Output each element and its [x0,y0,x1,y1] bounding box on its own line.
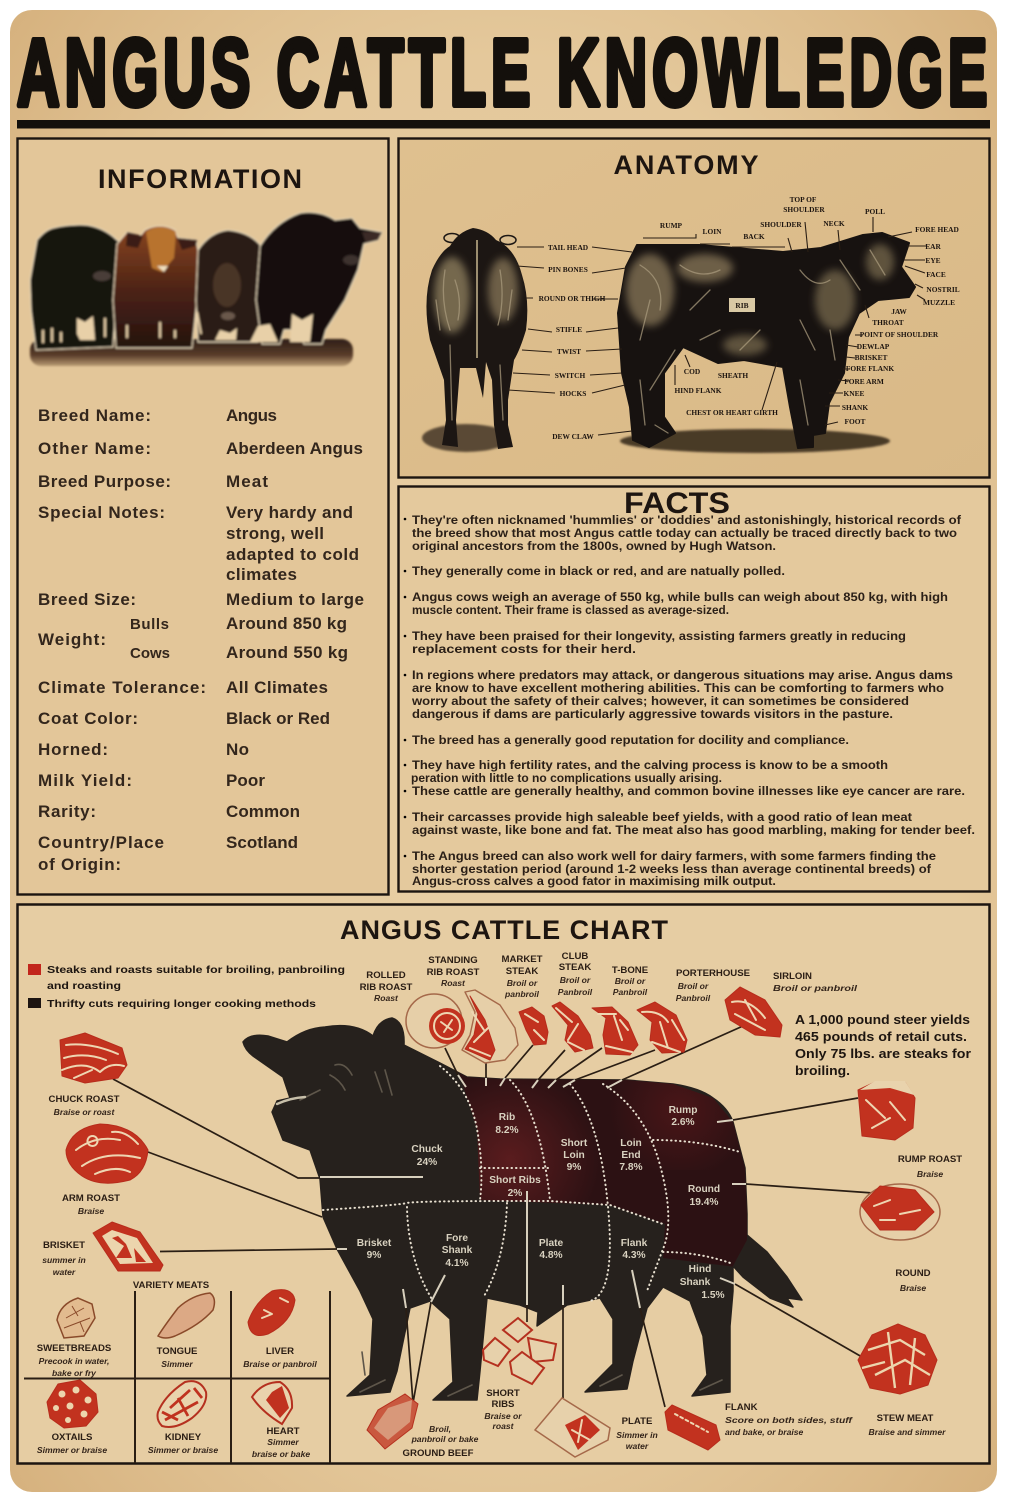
facts bullet list: Angus cows weigh an average of 550 kg, while bulls can weigh about 850 kg, with high [412,590,948,604]
facts bullet list: shorter gestation period (around 1-2 weeks less than average continental breeds) of [412,862,931,876]
info table: breed facts: Horned: [38,740,108,759]
cut: plate: water [626,1441,649,1451]
cow section labels: Short [561,1138,588,1149]
callout: yield note: A 1,000 pound steer yields [795,1013,970,1027]
cut: short ribs: RIBS [492,1399,515,1410]
info table: breed facts: Breed Name: [38,406,151,425]
info table: breed facts: Cows [130,645,170,662]
cow section labels: 8.2% [495,1125,519,1136]
anatomy labels: LOIN [703,227,722,236]
anatomy labels: SHOULDER [783,205,825,214]
anatomy labels: HIND FLANK [674,386,722,395]
panel: information [18,138,388,894]
cut: arm roast: ARM ROAST [62,1193,120,1204]
cow section labels: Chuck [411,1144,443,1155]
cut: liver: LIVER [266,1346,294,1357]
facts bullet list: dangerous if dams are particularly aggressive towards visitors in the pasture. [412,707,893,721]
anatomy labels: MUZZLE [923,298,955,307]
cow section labels: 4.3% [622,1250,646,1261]
cut: plate [535,1398,658,1457]
cut: rolled rib roast: Roast [374,993,399,1003]
anatomy labels: FORE ARM [844,377,884,386]
heading: information: INFORMATION [98,164,302,194]
cut: club steak: STEAK [559,962,591,973]
cow section labels [357,1105,725,1301]
cow section labels: Loin [620,1138,642,1149]
cow cut diagram [243,1018,802,1400]
cut: club steak: CLUB [562,951,588,962]
cow section labels: 24% [417,1157,437,1168]
anatomy labels: DEWLAP [857,342,890,351]
cut: round: Braise [900,1283,926,1293]
cow section labels: 19.4% [690,1197,718,1208]
anatomy labels: SHEATH [718,371,748,380]
cow side view [618,233,915,453]
cow section labels: 2.6% [671,1117,695,1128]
heading: anatomy: ANATOMY [614,150,758,180]
anatomy labels: TWIST [557,347,581,356]
anatomy labels: EYE [925,256,941,265]
anatomy labels: NOSTRIL [926,285,960,294]
anatomy labels: POLL [865,207,885,216]
cut: arm roast: Braise [78,1206,104,1216]
cut: liver: Braise or panbroil [243,1359,317,1369]
anatomy labels: SWITCH [555,371,585,380]
callout: yield note: 465 pounds of retail cuts. [795,1030,967,1044]
cut: standing rib roast: Roast [441,978,466,988]
cut: stew meat: Braise and simmer [869,1427,946,1437]
heading: variety meats: VARIETY MEATS [133,1280,210,1291]
info table: breed facts: Country/Place [38,833,164,852]
info table: breed facts [38,406,364,874]
facts bullet list: The breed has a generally good reputation for docility and compliance. [412,733,849,747]
info table: breed facts: Medium to large [226,590,364,609]
cut: liver [243,1290,317,1369]
cut: tongue [157,1293,214,1369]
info table: breed facts: Breed Purpose: [38,472,171,491]
info table: breed facts: Coat Color: [38,709,138,728]
cow section labels: Hind [689,1264,711,1275]
info table: breed facts: Black or Red [226,709,330,728]
info table: breed facts: All Climates [226,678,328,697]
cut: flank: FLANK [725,1402,758,1413]
cut: porterhouse: Panbroil [676,993,711,1003]
cut: rump roast [858,1081,962,1179]
cut: plate: PLATE [622,1416,653,1427]
cut: t-bone [592,965,649,1055]
anatomy labels: THROAT [872,318,904,327]
anatomy labels: RUMP [660,221,683,230]
cut: tongue: Simmer [161,1359,193,1369]
cut: heart: braise or bake [252,1449,310,1459]
info table: breed facts: Special Notes: [38,503,165,522]
cut: heart: Simmer [267,1437,299,1447]
cow rear view [422,228,527,452]
cut: kidney [148,1381,218,1455]
heading: chart: ANGUS CATTLE CHART [340,915,668,945]
label: rib: RIB [735,301,749,310]
cut: rump roast: Braise [917,1169,943,1179]
cut: club steak [552,951,593,1052]
cut: flank: Score on both sides, stuff [725,1415,853,1425]
cut: stew meat [858,1324,946,1437]
cut: standing rib roast: RIB ROAST [427,967,480,978]
cut: oxtails: OXTAILS [52,1432,93,1443]
cut: brisket [42,1222,163,1277]
info table: breed facts: Milk Yield: [38,771,132,790]
callout: yield note: Only 75 lbs. are steaks for [795,1047,971,1061]
info table: breed facts: climates [226,565,297,584]
anatomy labels: EAR [925,242,941,251]
cut: market steak: Broil or [507,978,538,988]
panel: facts [398,486,990,892]
cut: rump roast: RUMP ROAST [898,1154,962,1165]
anatomy labels: BRISKET [855,353,887,362]
info table: breed facts: Rarity: [38,802,96,821]
cow section labels: Fore [446,1233,468,1244]
cut: rolled rib roast: RIB ROAST [360,982,413,993]
cut: brisket: BRISKET [43,1240,85,1251]
facts bullet list: They have high fertility rates, and the calving process is know to be a smooth [412,758,888,772]
cut: chuck roast: Braise or roast [54,1107,115,1117]
cow section labels: Rump [669,1105,697,1116]
cut: short ribs: SHORT [486,1388,520,1399]
cut: t-bone: Broil or [615,976,646,986]
cut: ground beef: GROUND BEEF [403,1448,474,1459]
info table: breed facts: adapted to cold [226,545,359,564]
anatomy labels: FOOT [845,417,866,426]
legend [28,964,345,1010]
cow section labels: 9% [567,1162,581,1173]
cow section labels: Loin [563,1150,585,1161]
anatomy labels: ROUND OR THIGH [539,294,606,303]
anatomy labels: STIFLE [556,325,582,334]
facts bullet list: These cattle are generally healthy, and common bovine illnesses like eye cancer are rare. [412,784,965,798]
facts bullet list: Their carcasses provide high saleable beef yields, with a good ratio of lean meat [412,810,912,824]
facts bullet list: muscle content. Their frame is classed as average-sized. [412,603,729,617]
info table: breed facts: Other Name: [38,439,151,458]
cut: chuck roast: CHUCK ROAST [49,1094,120,1105]
anatomy labels: CHEST OR HEART GIRTH [686,408,778,417]
anatomy labels: FACE [926,270,946,279]
cut: plate: Simmer in [616,1430,658,1440]
cut: oxtails [37,1380,107,1455]
cut: market steak: MARKET [501,954,543,965]
cut: sweetbreads: bake or fry [52,1368,97,1378]
cut: round [860,1184,940,1293]
anatomy labels: COD [684,367,700,376]
facts bullet list [404,513,975,888]
cut: short ribs: roast [492,1421,515,1431]
heading: facts: FACTS [624,487,730,520]
cut: flank [665,1402,853,1450]
facts bullet list: are know to have excellent mothering abilities. This can be comforting to farmers who [412,681,944,695]
info table: breed facts: Around 850 kg [226,614,347,633]
callout: yield note: broiling. [795,1064,850,1078]
cut: heart [252,1382,310,1459]
label: rib [729,298,755,312]
cow section labels: 9% [367,1250,381,1261]
info table: breed facts: Very hardy and [226,503,353,522]
anatomy labels: SHOULDER [760,220,802,229]
info table: breed facts: Around 550 kg [226,643,348,662]
cow section labels: 4.8% [539,1250,563,1261]
cow section labels: Shank [442,1245,473,1256]
info table: breed facts: Meat [226,472,268,491]
cut: arm roast [62,1124,148,1216]
cut: ground beef: panbroil or bake [411,1434,479,1444]
facts bullet list: against waste, like bone and fat. The meat also has good marbling, making for tender beef. [412,823,975,837]
callout: yield note [795,1013,971,1078]
cut: heart: HEART [266,1426,300,1437]
cut: flank: and bake, or braise [725,1427,804,1437]
cut: sirloin: SIRLOIN [773,971,812,982]
variety meats grid [24,1291,330,1463]
info table: breed facts: Scotland [226,833,298,852]
legend: Thrifty cuts requiring longer cooking methods [47,998,316,1010]
info table: breed facts: Common [226,802,300,821]
anatomy labels: SHANK [842,403,868,412]
cow section labels: 1.5% [701,1290,725,1301]
cut: kidney: KIDNEY [165,1432,202,1443]
cut: short ribs: Braise or [484,1411,522,1421]
panel: anatomy [398,138,990,478]
cut: standing rib roast [427,955,518,1063]
cut: oxtails: Simmer or braise [37,1445,107,1455]
cut: club steak: Broil or [560,975,591,985]
info table: breed facts: of Origin: [38,855,121,874]
cut: sweetbreads: SWEETBREADS [37,1343,112,1354]
info table: breed facts: Angus [226,406,277,425]
anatomy labels: KNEE [844,389,865,398]
cut: chuck roast [49,1033,127,1117]
cut: standing rib roast: STANDING [428,955,478,966]
cut: sirloin [725,971,858,1037]
cut: tongue: TONGUE [157,1346,198,1357]
cut: rolled rib roast [360,970,465,1048]
cut: market steak: panbroil [504,989,540,999]
anatomy labels: JAW [891,307,907,316]
cut: t-bone: T-BONE [612,965,649,976]
title: ANGUS CATTLE KNOWLEDGE [17,18,987,125]
facts bullet list: Angus-cross calves a good fator in maximising milk output. [412,874,776,888]
cow section labels: Plate [539,1238,564,1249]
cut: rolled rib roast: ROLLED [366,970,406,981]
info table: breed facts: Bulls [130,616,169,633]
cow section labels: Brisket [357,1238,392,1249]
cut: sirloin: Broil or panbroil [773,983,858,993]
facts bullet list: peration with little to no complications usually arising. [411,771,722,785]
anatomy labels: NECK [823,219,845,228]
panel: angus cattle chart [18,904,990,1464]
anatomy labels: FORE FLANK [846,364,894,373]
anatomy labels: TOP OF [790,195,817,204]
cut: porterhouse: PORTERHOUSE [676,968,751,979]
cut: stew meat: STEW MEAT [877,1413,934,1424]
info table: breed facts: Climate Tolerance: [38,678,206,697]
cow section labels: 2% [508,1188,522,1199]
facts bullet list: They have been praised for their longevity, assisting farmers greatly in reducing [412,629,906,643]
cut: porterhouse: Broil or [678,981,709,991]
cow section labels: Rib [499,1112,515,1123]
facts bullet list: In regions where predators may attack, or dangerous situations may arise. Angus dams [412,668,953,682]
leader lines [508,217,926,435]
leader lines to cuts [113,1026,873,1407]
anatomy labels: BACK [743,232,765,241]
cut: brisket: water [53,1267,76,1277]
cut: brisket: summer in [42,1255,86,1265]
cut: sweetbreads: Precook in water, [39,1356,109,1366]
cow section labels: Round [688,1184,720,1195]
info table: breed facts: No [226,740,249,759]
cow section labels: Flank [621,1238,648,1249]
cut: short ribs [483,1318,556,1431]
anatomy labels [539,195,960,441]
cut: club steak: Panbroil [558,987,593,997]
cow section labels: Shank [680,1277,711,1288]
info table: breed facts: Poor [226,771,265,790]
anatomy labels: FORE HEAD [915,225,959,234]
anatomy labels: POINT OF SHOULDER [860,330,939,339]
anatomy labels: TAIL HEAD [548,243,588,252]
cut: market steak [501,954,548,1045]
cut: round: ROUND [895,1268,931,1279]
legend: Steaks and roasts suitable for broiling, panbroiling [47,964,345,976]
cow section labels: 4.1% [445,1258,469,1269]
cow section labels: 7.8% [619,1162,643,1173]
info table: breed facts: Aberdeen Angus [226,439,363,458]
info table: breed facts: strong, well [226,524,324,543]
cow section labels: Short Ribs [489,1175,541,1186]
anatomy labels: DEW CLAW [552,432,594,441]
anatomy labels: PIN BONES [548,265,588,274]
photo: four cattle [30,212,382,366]
facts bullet list: replacement costs for their herd. [412,642,636,656]
facts bullet list: the breed show that most Angus cattle today can actually be traced directly back to two [412,526,957,540]
facts bullet list: They're often nicknamed 'hummlies' or 'doddies' and astonishingly, historical records of [412,513,961,527]
cut: ground beef: Broil, [429,1424,451,1434]
cut: porterhouse [637,968,751,1053]
legend: and roasting [47,980,121,992]
info table: breed facts: Breed Size: [38,590,136,609]
cut: t-bone: Panbroil [613,987,648,997]
info table: breed facts: Weight: [38,630,106,649]
cow section labels: End [621,1150,641,1161]
facts bullet list: They generally come in black or red, and are natually polled. [412,564,785,578]
cut: market steak: STEAK [506,966,538,977]
facts bullet list: The Angus breed can also work well for dairy farmers, with some farmers finding the [412,849,936,863]
cut: sweetbreads [37,1298,112,1378]
facts bullet list: worry about the safety of their calves; however, it can sometimes be considered [411,694,909,708]
anatomy labels: HOCKS [560,389,586,398]
cut: ground beef [367,1394,479,1459]
cut: kidney: Simmer or braise [148,1445,218,1455]
facts bullet list: original ancestors from the 1800s, owned by Hugh Watson. [412,539,776,553]
